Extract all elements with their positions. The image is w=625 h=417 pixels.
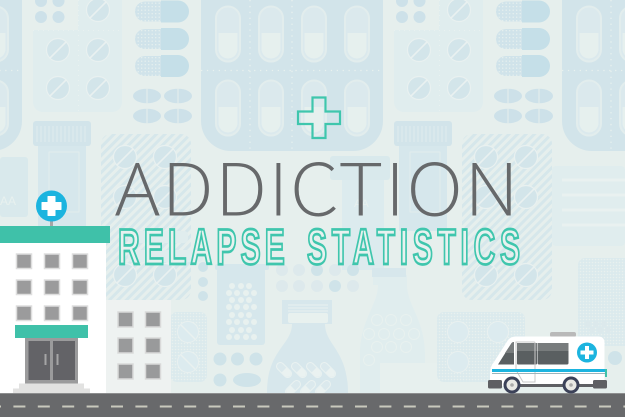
entrance doors — [25, 338, 78, 384]
title: Addiction: ADDICTION — [115, 133, 519, 236]
road — [0, 393, 625, 417]
icon: hospital sign — [36, 190, 67, 226]
medicine pattern: AA — [354, 198, 369, 210]
subtitle: Relapse Statistics — [118, 219, 520, 275]
hospital windows — [16, 254, 88, 320]
building: hospital — [0, 226, 110, 393]
icon: ambulance — [488, 332, 607, 394]
icon: outlined plus — [298, 98, 340, 138]
medicine pattern: AA — [0, 194, 16, 208]
subtitle: Relapse Statistics: RELAPSE — [118, 219, 285, 275]
hospital roof — [0, 226, 110, 243]
entrance awning — [15, 325, 88, 338]
building: side annex — [106, 300, 171, 393]
subtitle: Relapse Statistics: STATISTICS — [307, 219, 520, 275]
entrance steps — [13, 384, 90, 393]
